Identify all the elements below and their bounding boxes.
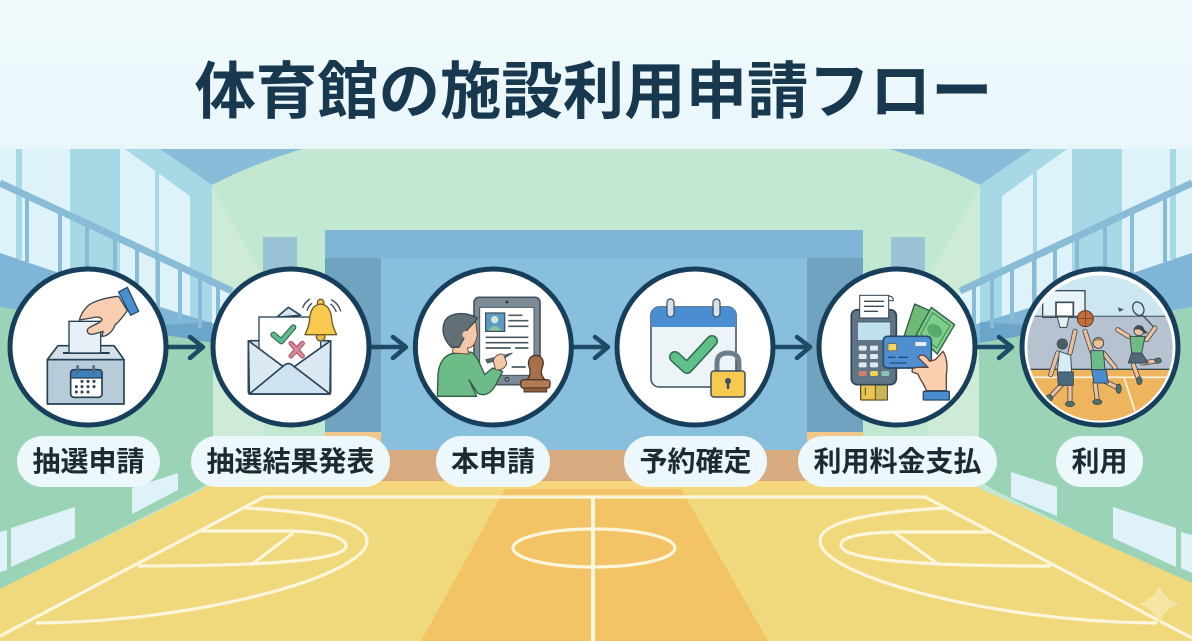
label: 予約確定: 予約確定	[639, 446, 752, 477]
gym background illustration	[0, 149, 1192, 641]
title: 体育館の施設利用申請フロー	[194, 58, 992, 127]
arrow 5	[977, 337, 1012, 358]
label: 利用	[1056, 436, 1143, 487]
title band	[0, 0, 1192, 149]
step 4 icon: calendar check and padlock	[617, 269, 773, 425]
label: 予約確定	[624, 436, 767, 487]
label: 抽選申請: 抽選申請	[32, 446, 145, 477]
label: 抽選申請	[17, 436, 160, 487]
label: 利用: 利用	[1071, 446, 1128, 477]
icon: sparkle watermark	[1139, 585, 1179, 623]
arrow 1	[168, 337, 203, 358]
stage wall	[325, 230, 863, 482]
step 1 icon: ballot box	[10, 269, 166, 425]
left upper wall	[0, 149, 302, 589]
label: 本申請	[436, 436, 550, 487]
label: 利用料金支払: 利用料金支払	[813, 446, 982, 477]
arrow 2	[372, 337, 406, 358]
step 3 icon: person signing on tablet with stamp	[415, 269, 571, 425]
label: 利用料金支払	[798, 436, 997, 487]
step 5 icon: payment terminal, cash and card	[819, 269, 975, 425]
label: 本申請: 本申請	[451, 446, 535, 477]
arrow 4	[776, 337, 810, 358]
step 2 icon: result envelope and bell	[213, 269, 369, 425]
arrow 3	[573, 337, 608, 358]
right upper wall	[890, 149, 1192, 589]
label: 抽選結果発表	[191, 436, 390, 487]
label: 抽選結果発表: 抽選結果発表	[206, 446, 375, 477]
basketball court floor	[0, 481, 1192, 641]
step 6 icon: people playing sports	[1020, 268, 1180, 429]
lower wall panels	[0, 472, 1192, 573]
